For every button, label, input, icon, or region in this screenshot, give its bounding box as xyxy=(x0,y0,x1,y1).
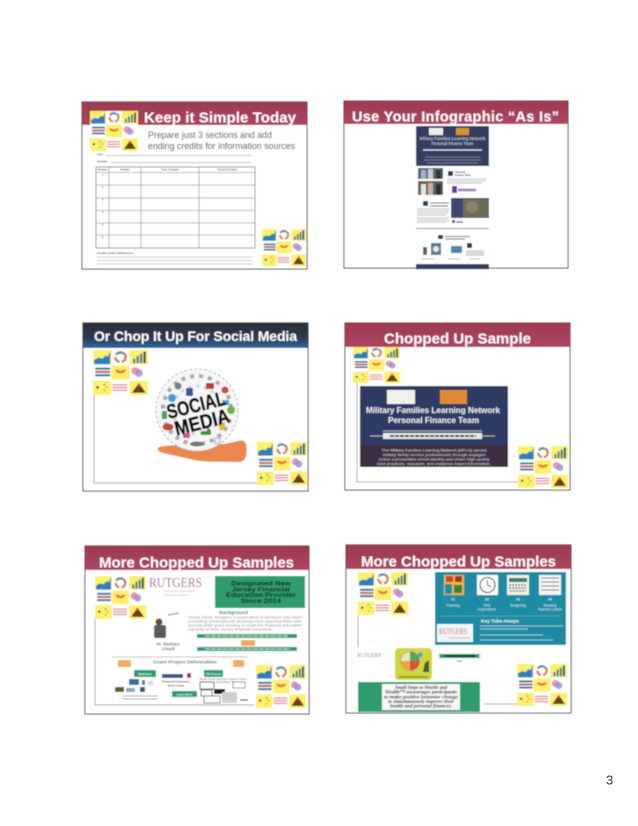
slide 1 title and subtitle fields xyxy=(97,152,252,164)
banner heading: Personal Finance Team xyxy=(388,416,479,425)
slide 6 content frame xyxy=(357,615,359,647)
banner heading: Military Families Learning Network xyxy=(366,406,501,415)
planning icon xyxy=(444,575,464,595)
banner description: The Military Families Learning Network (MFLN) serves xyxy=(382,448,487,452)
step labels: Nutrition Labels xyxy=(538,608,562,612)
slide 2: Use Your Infographic As Is xyxy=(344,101,568,269)
slide 5 top icon grid xyxy=(95,576,146,619)
slide 4 bottom icon grid xyxy=(518,446,568,488)
deliverable: PD events: Resources, Newsletters, Brochures xyxy=(202,680,245,684)
slide 1 planning table: Text Content xyxy=(162,168,179,172)
designation box: Jersey Financial xyxy=(232,586,290,594)
step labels: #3 xyxy=(516,598,520,602)
slide 1 planning table: 6 xyxy=(102,235,104,239)
designation box: Education Provider xyxy=(226,592,297,599)
slide 5 title: More Chopped Up Samples xyxy=(99,554,294,572)
step labels: Expenditure xyxy=(478,608,496,612)
deliverable: webinars: Webinars xyxy=(138,672,152,676)
slide 1 planning table: Header xyxy=(120,168,131,172)
slide 1 planning table: 1 xyxy=(102,173,104,177)
banner description xyxy=(377,448,491,466)
step labels: #1 xyxy=(451,598,455,602)
infographic banner xyxy=(416,126,489,166)
page number: 3 xyxy=(606,772,613,788)
infographic section one text: Personal xyxy=(455,171,465,174)
deliverable: financial education boot camp: Financial Education xyxy=(162,680,190,684)
infographic banner: Military Families Learning Network xyxy=(420,136,486,141)
slide 1 title and subtitle fields: Title: xyxy=(97,152,104,156)
infographic divider xyxy=(416,228,489,230)
designation box: Since 2014 xyxy=(241,598,281,605)
step labels: #2 xyxy=(485,598,489,602)
deliverable: PD events: Money Smart Seminars, Speech Series xyxy=(199,677,247,681)
slide 1 top icon grid xyxy=(90,111,138,151)
slide 1 planning table: Visual Content xyxy=(217,168,237,172)
deliverables divider xyxy=(112,656,248,658)
slide 1 title and subtitle fields: Subtitle: xyxy=(97,160,108,164)
slide 2 header band xyxy=(344,101,568,124)
background section: providing professional development opportunities with xyxy=(188,620,302,624)
designation box xyxy=(215,576,305,608)
nutrition label icon xyxy=(539,575,561,595)
slide 4: Chopped Up Sample xyxy=(345,323,570,490)
slide 1 planning table: 3 xyxy=(102,198,104,202)
infographic banner: Personal Finance Team xyxy=(432,141,474,146)
slide 2 embedded infographic xyxy=(416,126,489,269)
slide 1 instructions xyxy=(148,130,295,152)
banner heading xyxy=(366,406,501,425)
social media globe xyxy=(156,369,238,451)
slide 6 bottom icon grid xyxy=(517,664,567,706)
small Rutgers logo: RUTGERS xyxy=(357,652,381,659)
Dr. O'Neill portrait xyxy=(154,613,180,652)
Rutgers logo xyxy=(149,575,202,597)
background section: Since 2004, Rutgers Cooperative Extension has been xyxy=(188,616,303,620)
slide 3 bottom icon grid xyxy=(257,442,307,485)
program description box: Wealth™ encourages participants xyxy=(385,690,457,696)
infographic section three xyxy=(422,235,484,259)
globe words: SOCIAL xyxy=(164,388,228,424)
slide 1 planning table xyxy=(96,167,255,248)
slide 3: Or Chop It Up For Social Media xyxy=(83,323,308,491)
step labels: Budgeting xyxy=(510,604,526,608)
green ribbon banner xyxy=(438,654,481,663)
yellow plate badge xyxy=(395,648,432,680)
slide 1 header band xyxy=(82,102,307,125)
step labels: #4 xyxy=(548,598,552,602)
infographic team photos xyxy=(418,168,443,195)
deliverable: financial education boot camp: Learn More xyxy=(176,692,193,696)
program description box: to make positive behavior change xyxy=(384,696,459,700)
slide 4 top icon grid xyxy=(353,347,400,383)
step labels xyxy=(446,598,562,612)
budgeting icon xyxy=(507,575,529,595)
program description box: health and personal finances. xyxy=(390,704,452,710)
orange logo xyxy=(440,390,467,404)
banner description: online communities which identify and share high-quality xyxy=(378,458,490,462)
slide 1 bottom icon grid xyxy=(262,229,306,266)
slide 1 credits: Credits and/or References: xyxy=(97,251,134,255)
key take-aways: Key Take-Aways xyxy=(481,618,519,624)
Dr. O'Neill portrait: O'Neill xyxy=(161,646,175,652)
background section: capacity of New Jersey financial educators. xyxy=(188,628,273,632)
slide 1: Keep it Simple Today xyxy=(82,102,307,269)
deliverable: financial education boot camp: Boot Camp xyxy=(168,684,184,688)
Rutgers logo: RUTGERS xyxy=(149,575,202,590)
slide 2 title: Use Your Infographic “As Is” xyxy=(352,110,559,126)
slide 1 planning table: 2 xyxy=(102,185,104,189)
slide 6: More Chopped Up Samples xyxy=(346,545,571,713)
deliverables heading xyxy=(118,660,244,667)
teal takeaways panel xyxy=(435,572,566,645)
step labels: Time xyxy=(483,604,491,608)
slide 4 header band xyxy=(345,323,570,347)
slide 5 content frame xyxy=(95,619,254,705)
Rutgers logo: Experiment Station xyxy=(164,593,189,597)
slide 1 credits xyxy=(97,251,253,264)
slide 4 title: Chopped Up Sample xyxy=(384,330,531,348)
step labels: Reading xyxy=(544,604,556,608)
slide 3 content frame xyxy=(94,395,257,483)
slide 3 title: Or Chop It Up For Social Media xyxy=(94,328,297,344)
background section xyxy=(188,610,303,632)
deliverable: PD events: PD Events xyxy=(206,672,221,676)
banner description: military family service professionals through engaged xyxy=(382,453,486,457)
background section: Background xyxy=(219,610,248,616)
Dr. O'Neill portrait: Dr. Barbara xyxy=(156,642,180,646)
deliverable: webinars xyxy=(115,670,158,699)
slide 1 planning table: 5 xyxy=(102,222,104,226)
step labels: Planning xyxy=(446,604,460,608)
slide 6 title: More Chopped Up Samples xyxy=(361,554,556,570)
Rutgers logo: New Jersey Agricultural xyxy=(164,589,195,593)
slide 5: More Chopped Up Samples xyxy=(85,546,309,714)
slide 6 header band xyxy=(346,545,571,569)
background section: special state grant funding to build the financial education xyxy=(188,624,302,628)
infographic section one text xyxy=(447,171,487,193)
program description box xyxy=(358,682,480,712)
deliverable: PD events xyxy=(199,670,248,703)
hand illustration xyxy=(158,440,247,462)
slide 3 top icon grid xyxy=(93,350,148,395)
slide 3 header band xyxy=(83,323,308,348)
slide 5 bottom icon grid xyxy=(256,665,306,708)
green ribbon banner: Yay! xyxy=(456,659,463,663)
infographic section two xyxy=(417,198,489,223)
slide 5 header band xyxy=(85,546,309,570)
slide 1 title: Keep it Simple Today xyxy=(144,110,297,126)
banner description: best practices, research, and evidence-based information. xyxy=(377,462,491,466)
social media globe: MEDIA xyxy=(172,406,232,440)
slide 1 planning table: Section xyxy=(97,168,108,172)
Rutgers logo box: RUTGERS xyxy=(439,627,467,636)
slide 1 instructions: Prepare just 3 sections and add xyxy=(148,130,272,141)
deliverable: financial education boot camp xyxy=(162,673,197,697)
social icons on globe xyxy=(162,382,235,446)
slide 1 planning table: 4 xyxy=(102,210,104,214)
green statement bars xyxy=(197,634,297,651)
program description box: Small Steps to Health and xyxy=(395,686,448,691)
designation box: Designated New xyxy=(231,580,292,588)
slide 4 content frame xyxy=(357,383,518,482)
deliverables heading: Grant Project Deliverables xyxy=(153,660,217,664)
slide 6 frame remnant xyxy=(484,703,517,705)
clock icon xyxy=(477,575,498,595)
infographic footer bar xyxy=(416,264,489,269)
slide 1 instructions: ending credits for information sources xyxy=(148,141,295,152)
banner ribbon xyxy=(370,431,495,439)
program description box: to simultaneously improve their xyxy=(388,700,454,705)
slide 6 top icon grid xyxy=(358,572,408,615)
sample banner xyxy=(360,386,508,467)
extension logo xyxy=(387,390,415,404)
infographic section one text: Finance Team xyxy=(455,174,471,177)
